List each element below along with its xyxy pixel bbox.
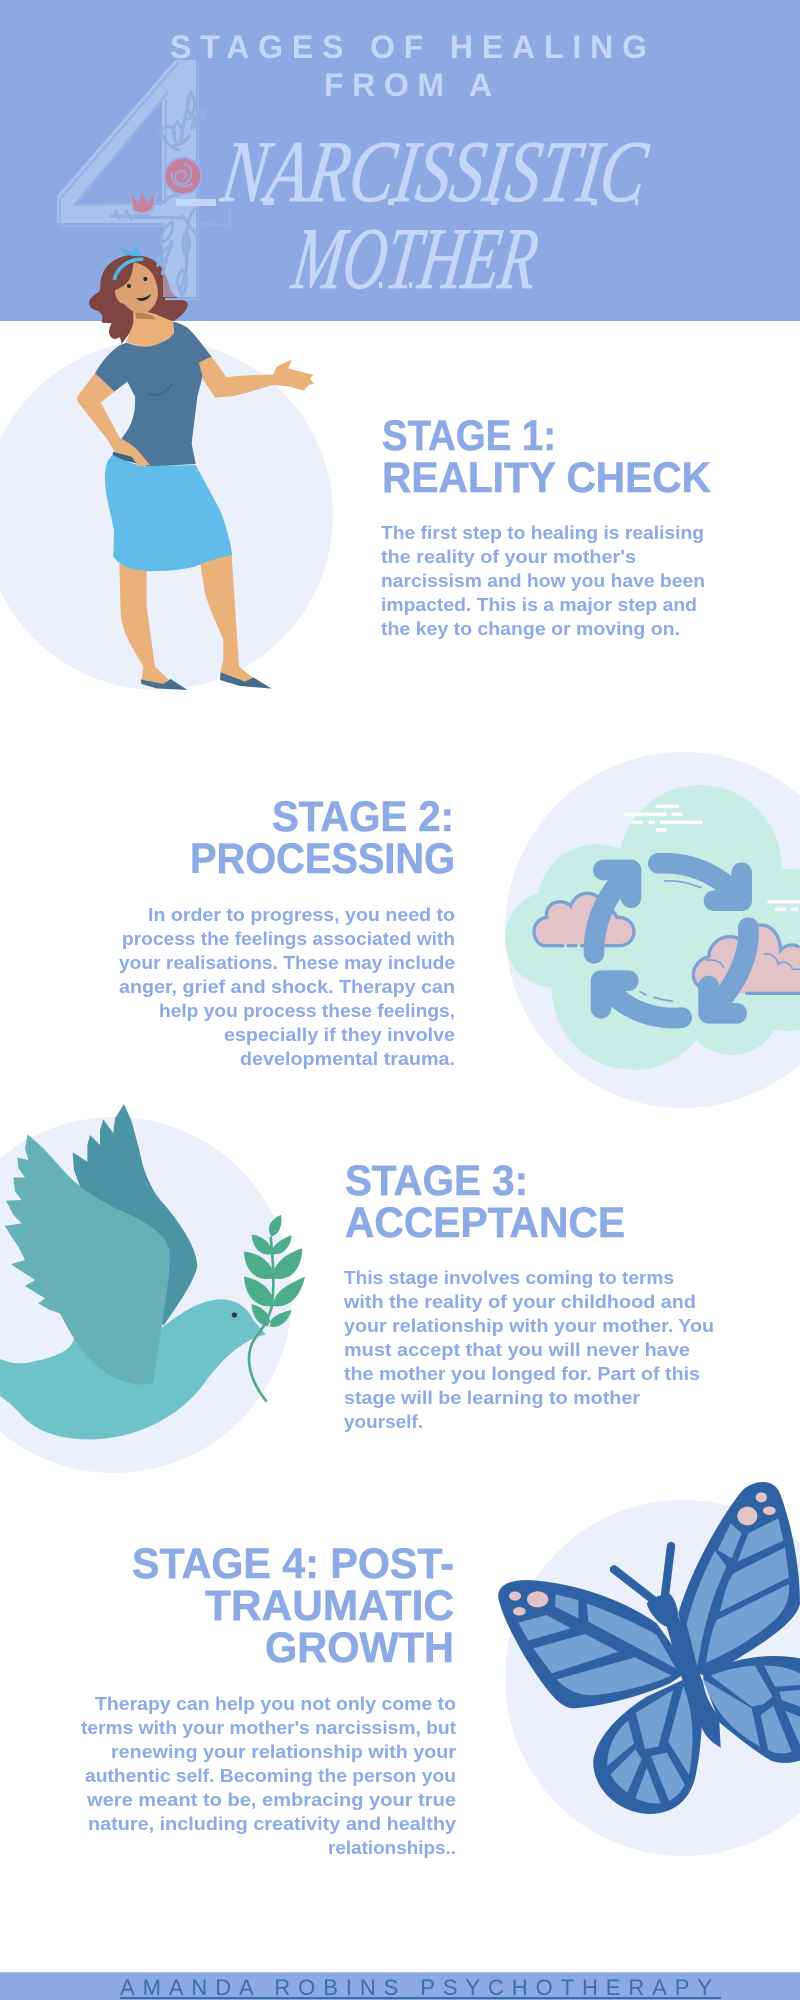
olive branch: [244, 1215, 305, 1402]
heading: stage 4: GROWTH: [265, 1624, 454, 1672]
body: stage 2: [119, 904, 455, 1069]
illustration: blue butterfly: [498, 1482, 800, 1814]
title: narcissistic mother script lettering: MOTHER: [286, 210, 544, 308]
body: stage 3: [343, 1267, 714, 1432]
heading: stage 4: TRAUMATIC: [205, 1582, 454, 1630]
background circle: stage 2: [505, 752, 800, 1108]
body: stage 1: the key to change or moving on.: [381, 618, 680, 639]
body: stage 3: This stage involves coming to terms: [344, 1267, 674, 1288]
body: stage 4: relationships..: [328, 1837, 456, 1858]
illustration: woman gesturing: [77, 245, 314, 690]
body: stage 3: the mother you longed for. Part of this: [344, 1363, 700, 1384]
title: stages of healing from a: STAGES OF HEALING: [170, 29, 647, 65]
heading: stage 2: PROCESSING: [190, 835, 455, 883]
footer text: amanda robins psychotherapy: AMANDA ROBINS PSYCHOTHERAPY: [120, 1975, 712, 2000]
body: stage 4: nature, including creativity and healthy: [88, 1813, 457, 1834]
body: stage 3: yourself.: [344, 1411, 423, 1432]
body: stage 4: were meant to be, embracing your true: [86, 1789, 456, 1810]
panel: stage 2 text: [119, 793, 455, 1069]
panel: header band: [0, 0, 800, 321]
illustration: dove with olive branch: [0, 1104, 305, 1439]
heading: stage 3: [345, 1157, 625, 1247]
body: stage 1: impacted. This is a major step and: [381, 594, 697, 615]
body: stage 1: The first step to healing is realising: [381, 522, 704, 543]
heading: stage 3: ACCEPTANCE: [345, 1199, 625, 1247]
body: stage 2: process the feelings associated with: [122, 928, 455, 949]
body: stage 4: [81, 1693, 457, 1858]
heading: stage 2: [190, 793, 455, 883]
body: stage 2: help you process these feelings,: [159, 1000, 455, 1021]
panel: stage 1 text: [381, 412, 711, 639]
heading: stage 4: [132, 1540, 454, 1672]
title: narcissistic mother script lettering: NARCISSISTIC: [215, 123, 654, 221]
title: stages of healing from a: [170, 29, 647, 103]
body: stage 3: your relationship with your mother. You: [344, 1315, 714, 1336]
heading: stage 1: STAGE 1:: [382, 412, 556, 460]
body: stage 4: authentic self. Becoming the person you: [85, 1765, 456, 1786]
body: stage 4: terms with your mother's narcissism, but: [81, 1717, 456, 1738]
heading: stage 1: REALITY CHECK: [382, 454, 711, 502]
body: stage 2: especially if they involve: [224, 1024, 455, 1045]
body: stage 2: In order to progress, you need to: [148, 904, 455, 925]
panel: footer band: [0, 1972, 800, 2000]
heading: stage 2: STAGE 2:: [272, 793, 454, 841]
illustration: cycle arrows with clouds: [505, 785, 800, 1070]
panel: stage 3 text: [343, 1157, 714, 1432]
near wing: [5, 1134, 170, 1385]
background circle: stage 3: [0, 1117, 292, 1473]
background circle: stage 4: [505, 1500, 800, 1856]
decorative numeral 4 with flowers: [57, 60, 230, 299]
body: stage 1: narcissism and how you have been: [381, 570, 705, 591]
heading: stage 3: STAGE 3:: [345, 1157, 528, 1205]
body: stage 4: renewing your relationship with your: [111, 1741, 456, 1762]
body: stage 3: stage will be learning to mother: [344, 1387, 640, 1408]
body: stage 2: developmental trauma.: [240, 1048, 455, 1069]
far wing: [73, 1104, 197, 1326]
body: stage 1: the reality of your mother's: [381, 546, 636, 567]
title: stages of healing from a: FROM A: [324, 67, 492, 103]
dove body: [0, 1299, 266, 1439]
panel: stage 4 text: [81, 1540, 457, 1858]
body: stage 2: anger, grief and shock. Therapy can: [119, 976, 455, 997]
body: stage 3: must accept that you will never have: [344, 1339, 690, 1360]
heading: stage 1: [382, 412, 711, 502]
body: stage 4: Therapy can help you not only come to: [95, 1693, 456, 1714]
body: stage 1: [381, 522, 705, 639]
background circle: stage 1: [0, 340, 333, 690]
heading: stage 4: STAGE 4: POST-: [132, 1540, 454, 1588]
body: stage 2: your realisations. These may include: [119, 952, 455, 973]
body: stage 3: with the reality of your childhood and: [343, 1291, 696, 1312]
title: narcissistic mother script lettering: [176, 123, 654, 308]
